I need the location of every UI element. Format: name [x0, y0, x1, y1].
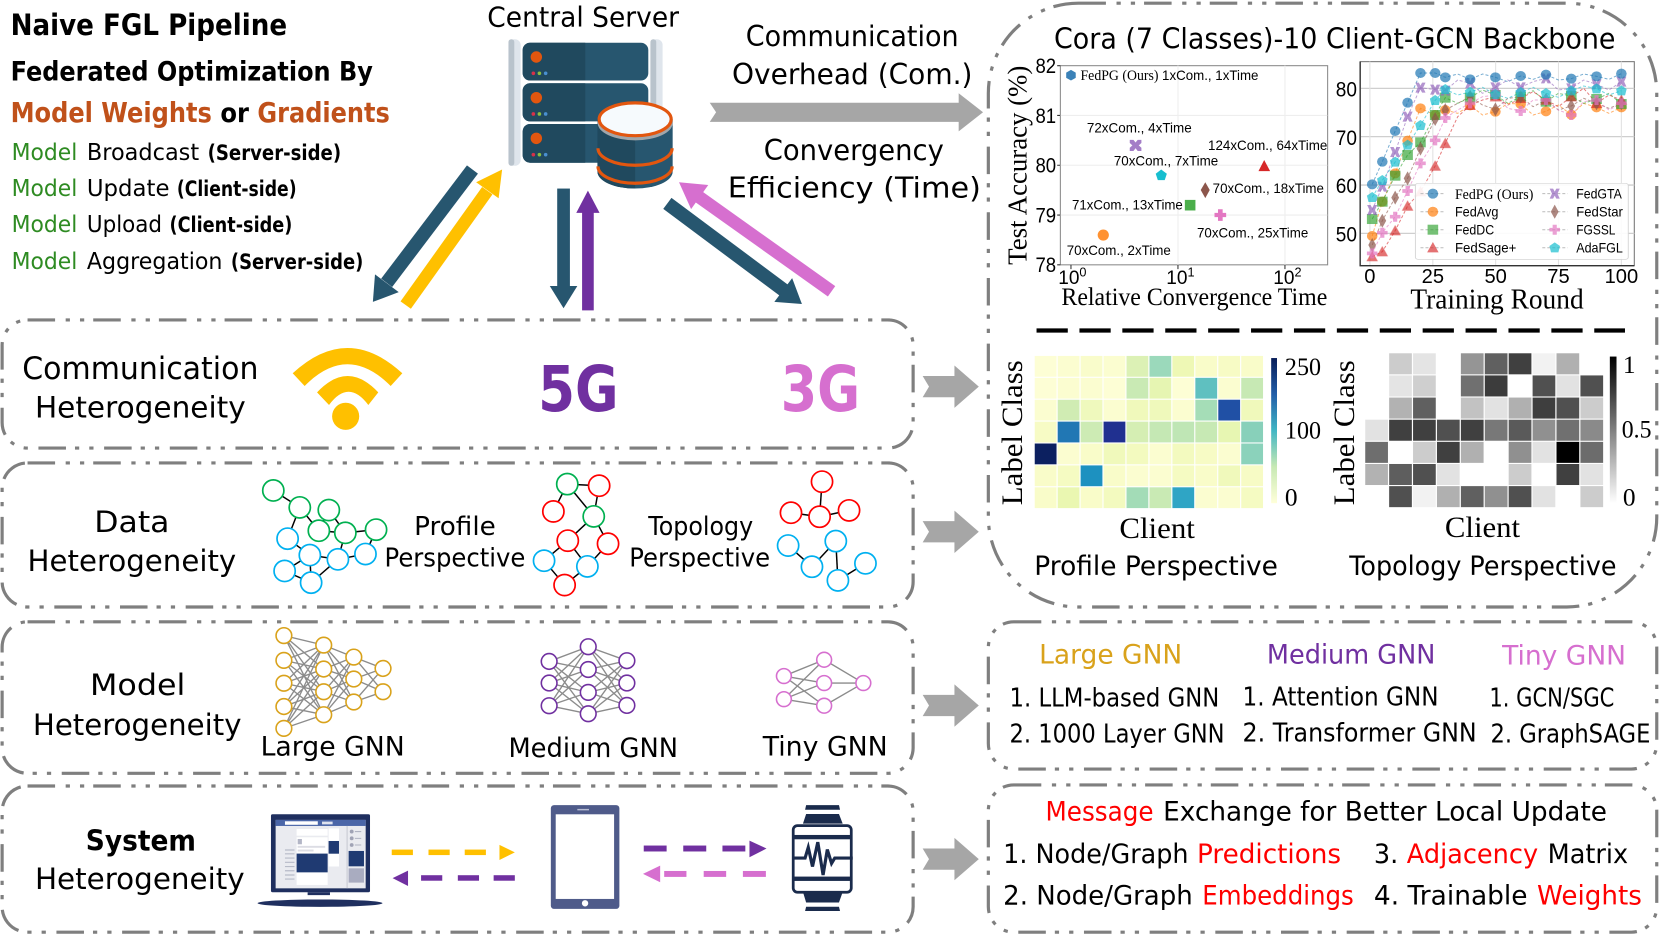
- heading: communication heterogeneity: Communication: [22, 351, 258, 387]
- chart: accuracy vs convergence scatter: 124xCom., 64xTime: [1208, 138, 1328, 153]
- chart: accuracy vs convergence scatter: 80: [1035, 155, 1056, 178]
- chart: accuracy vs convergence scatter: 2: [1294, 264, 1302, 279]
- title block: Naive FGL Pipeline: Naive FGL Pipeline: [11, 7, 287, 42]
- list item: adjacency matrix: Matrix: [1548, 839, 1628, 870]
- chart: accuracy over training rounds: 60: [1336, 175, 1357, 198]
- chart: accuracy vs convergence scatter: 70xCom., 7xTime: [1114, 153, 1219, 168]
- chart: accuracy over training rounds: 100: [1605, 266, 1638, 288]
- heatmap: profile perspective: [997, 353, 1321, 582]
- list: tiny GNN: Tiny GNN: [1501, 641, 1626, 672]
- title block: Naive FGL Pipeline: Federated Optimization By: [11, 57, 373, 88]
- chart: accuracy vs convergence scatter: FedPG (Ours): [1080, 68, 1159, 84]
- heatmap: topology perspective: Client: [1445, 512, 1521, 544]
- heatmap: topology perspective: [1329, 351, 1651, 582]
- chart: accuracy vs convergence scatter: 70xCom., 18xTime: [1213, 181, 1324, 196]
- list: large GNN: 1. LLM-based GNN: [1010, 683, 1219, 713]
- list item: adjacency matrix: 3.: [1374, 839, 1398, 870]
- label: profile perspective: Perspective: [385, 543, 525, 573]
- title block: Naive FGL Pipeline: or: [220, 98, 249, 129]
- chart: accuracy over training rounds: 70: [1336, 127, 1357, 150]
- title block: Naive FGL Pipeline: Update: [87, 175, 169, 202]
- chart: accuracy vs convergence scatter: 10: [1166, 268, 1187, 289]
- title block: Naive FGL Pipeline: [11, 7, 390, 275]
- chart: accuracy vs convergence scatter: 70xCom., 25xTime: [1197, 225, 1309, 240]
- title block: Naive FGL Pipeline: (Client-side): [169, 212, 292, 237]
- heading: message exchange: Message: [1046, 796, 1154, 827]
- title block: Naive FGL Pipeline: Model Weights: [11, 97, 212, 129]
- arrow: communication to results: [923, 365, 979, 408]
- list item: embeddings: [1003, 881, 1354, 912]
- heading: communication heterogeneity: [22, 351, 258, 424]
- label: profile perspective: [385, 511, 525, 573]
- text: communication overhead: Communication: [746, 19, 959, 53]
- chart: accuracy vs convergence scatter: Relative Convergence Time: [1061, 283, 1327, 311]
- chart: accuracy vs convergence scatter: 71xCom., 13xTime: [1072, 198, 1183, 213]
- list: medium GNN: Medium GNN: [1267, 640, 1435, 671]
- heatmap: topology perspective: Topology Perspective: [1348, 551, 1617, 582]
- chart: accuracy over training rounds: FedAvg: [1455, 205, 1498, 220]
- chart: accuracy vs convergence scatter: 10: [1273, 268, 1294, 289]
- separator line: [1037, 329, 1625, 333]
- heading: system heterogeneity: Heterogeneity: [35, 861, 245, 896]
- list item: embeddings: Embeddings: [1202, 881, 1354, 912]
- heading: data heterogeneity: [28, 504, 236, 578]
- list: large GNN: 2. 1000 Layer GNN: [1010, 719, 1225, 749]
- panel: system heterogeneity: [2, 786, 913, 932]
- arrow: purple up to server: [576, 191, 600, 310]
- list item: embeddings: 2. Node/Graph: [1003, 881, 1193, 912]
- list item: predictions: Predictions: [1197, 839, 1341, 870]
- chart: accuracy over training rounds: FedSage+: [1455, 241, 1516, 256]
- title block: Naive FGL Pipeline: Model: [12, 175, 77, 202]
- arrow: dashed purple left: [393, 871, 515, 886]
- list item: trainable weights: [1374, 881, 1642, 912]
- label: profile perspective: Profile: [414, 511, 496, 541]
- list: tiny GNN: 1. GCN/SGC: [1489, 683, 1614, 713]
- list: large GNN: [1010, 640, 1225, 749]
- title block: Naive FGL Pipeline: (Client-side): [177, 176, 297, 201]
- label: topology perspective: Perspective: [629, 543, 770, 573]
- chart: accuracy over training rounds: 75: [1547, 266, 1570, 288]
- text: convergency efficiency: [728, 133, 981, 205]
- title block: Naive FGL Pipeline: (Server-side): [231, 249, 363, 274]
- arrow: pink up to server: [679, 182, 832, 291]
- panel: data heterogeneity: [2, 463, 913, 607]
- chart: accuracy over training rounds: Training Round: [1410, 284, 1584, 315]
- heading: data heterogeneity: Data: [94, 504, 169, 539]
- arrow: data to results: [923, 511, 979, 553]
- label: topology perspective: [629, 511, 770, 573]
- text: convergency efficiency: Efficiency (Time): [728, 171, 981, 205]
- chart: accuracy over training rounds: FedDC: [1455, 223, 1494, 238]
- chart: accuracy vs convergence scatter: 79: [1035, 204, 1056, 227]
- icon: laptop: [258, 814, 383, 907]
- heatmap: topology perspective: 0: [1623, 483, 1636, 511]
- heatmap: profile perspective: 100: [1285, 417, 1321, 445]
- text: convergency efficiency: Convergency: [764, 133, 944, 167]
- title block: Naive FGL Pipeline: Upload: [87, 211, 162, 238]
- list item: adjacency matrix: Adjacency: [1407, 839, 1538, 870]
- arrow: dashed purple right: [644, 841, 767, 857]
- chart: accuracy over training rounds: 50: [1484, 266, 1507, 288]
- chart: accuracy vs convergence scatter: 78: [1035, 254, 1056, 277]
- chart: accuracy over training rounds: 50: [1336, 224, 1357, 247]
- icon: smartwatch: [792, 805, 853, 911]
- text: communication overhead: [732, 19, 972, 91]
- chart: accuracy over training rounds: FedPG (Ours): [1455, 187, 1534, 203]
- heading: model heterogeneity: Heterogeneity: [33, 707, 242, 742]
- chart: accuracy over training rounds: FedStar: [1576, 205, 1623, 220]
- heading: Cora 10 client GCN backbone: Cora (7 Classes)-10 Client-GCN Backbone: [1054, 22, 1615, 56]
- panel: message exchange: [988, 785, 1657, 932]
- chart: accuracy over training rounds: 80: [1336, 78, 1357, 101]
- chart: accuracy vs convergence scatter: 81: [1035, 105, 1056, 128]
- list: tiny GNN: [1489, 641, 1650, 749]
- icon: server with database: [508, 39, 673, 189]
- title block: Naive FGL Pipeline: (Server-side): [208, 140, 341, 165]
- icon: 5G: 5G: [538, 352, 619, 426]
- chart: accuracy vs convergence scatter: 1xCom., 1xTime: [1162, 68, 1259, 83]
- text: communication overhead: Overhead (Com.): [732, 57, 972, 91]
- heading: data heterogeneity: Heterogeneity: [28, 543, 236, 578]
- panel: communication heterogeneity: [2, 320, 913, 448]
- list item: trainable weights: 4. Trainable: [1374, 881, 1528, 912]
- label: topology perspective: Topology: [647, 511, 753, 541]
- arrow: server down right: [667, 203, 802, 304]
- title block: Naive FGL Pipeline: Model: [12, 211, 77, 238]
- list: medium GNN: 2. Transformer GNN: [1243, 718, 1477, 748]
- arrow: dashed pink left: [643, 866, 766, 882]
- heatmap: profile perspective: 0: [1285, 483, 1298, 511]
- list item: predictions: [1003, 839, 1341, 870]
- arrow: server to results: [710, 93, 983, 131]
- label: large GNN: Large GNN: [261, 731, 405, 762]
- title block: Naive FGL Pipeline: Model: [12, 139, 77, 166]
- chart: accuracy over training rounds: [1336, 62, 1638, 315]
- title block: Naive FGL Pipeline: Model: [12, 248, 77, 275]
- heading: model heterogeneity: [33, 667, 242, 742]
- chart: accuracy vs convergence scatter: 1: [1187, 264, 1195, 279]
- chart: accuracy vs convergence scatter: [1001, 55, 1328, 311]
- chart: accuracy vs convergence scatter: Test Accuracy (%): [1001, 66, 1032, 265]
- label: tiny GNN: Tiny GNN: [762, 731, 888, 762]
- list item: adjacency matrix: [1374, 839, 1628, 870]
- chart: accuracy vs convergence scatter: 10: [1058, 268, 1079, 289]
- icon: wifi: [293, 348, 402, 430]
- heatmap: topology perspective: Label Class: [1329, 360, 1361, 505]
- arrow: model to GNN list: [923, 684, 979, 727]
- heatmap: profile perspective: 250: [1285, 353, 1321, 381]
- chart: accuracy vs convergence scatter: 82: [1035, 55, 1056, 78]
- panel: experimental results: [988, 3, 1657, 607]
- title block: Naive FGL Pipeline: Broadcast: [87, 139, 199, 166]
- heatmap: profile perspective: Label Class: [997, 360, 1029, 505]
- chart: accuracy over training rounds: FGSSL: [1576, 223, 1616, 238]
- heatmap: profile perspective: Profile Perspective: [1034, 551, 1278, 582]
- heading: system heterogeneity: [35, 824, 245, 896]
- arrow: dashed yellow right: [392, 845, 515, 860]
- network: large GNN: [276, 628, 391, 736]
- panel: GNN model list: [988, 622, 1657, 769]
- heatmap: topology perspective: 0.5: [1622, 415, 1651, 443]
- chart: accuracy over training rounds: AdaFGL: [1576, 241, 1623, 256]
- chart: accuracy over training rounds: 0: [1364, 266, 1375, 288]
- list item: predictions: 1. Node/Graph: [1003, 839, 1189, 870]
- chart: accuracy over training rounds: FedGTA: [1576, 187, 1623, 202]
- title block: Naive FGL Pipeline: Aggregation: [87, 248, 222, 275]
- graph: separated topology graph: [778, 471, 876, 591]
- heading: communication heterogeneity: Heterogeneity: [35, 389, 246, 424]
- panel: model heterogeneity: [2, 622, 913, 773]
- network: medium GNN: [541, 639, 635, 722]
- arrow: server down center: [550, 189, 577, 308]
- arrow: system to message exchange: [923, 838, 979, 880]
- arrow: yellow up to server: [406, 169, 502, 305]
- title block: Naive FGL Pipeline: Gradients: [257, 97, 390, 129]
- chart: accuracy vs convergence scatter: 72xCom., 4xTime: [1087, 120, 1192, 135]
- list: medium GNN: [1243, 640, 1477, 748]
- chart: accuracy over training rounds: 25: [1422, 266, 1444, 288]
- network: tiny GNN: [776, 652, 871, 713]
- icon: tablet: [551, 805, 619, 909]
- central server label: Central Server: [487, 1, 680, 33]
- list: large GNN: Large GNN: [1039, 640, 1182, 671]
- heading: model heterogeneity: Model: [90, 667, 185, 702]
- graph: mixed label graph: [533, 474, 619, 596]
- list item: trainable weights: Weights: [1537, 881, 1642, 912]
- label: medium GNN: Medium GNN: [508, 733, 678, 764]
- chart: accuracy vs convergence scatter: 0: [1079, 264, 1087, 279]
- heatmap: profile perspective: Client: [1119, 513, 1196, 545]
- arrow: server down left: [373, 169, 472, 302]
- icon: 3G: 3G: [781, 352, 860, 426]
- list: medium GNN: 1. Attention GNN: [1243, 682, 1439, 712]
- heatmap: topology perspective: 1: [1623, 351, 1636, 379]
- chart: accuracy vs convergence scatter: 70xCom., 2xTime: [1067, 243, 1171, 258]
- graph: mixed profile graph: [263, 480, 387, 593]
- heading: system heterogeneity: System: [86, 824, 196, 858]
- heading: message exchange: Exchange for Better Local Update: [1163, 796, 1607, 827]
